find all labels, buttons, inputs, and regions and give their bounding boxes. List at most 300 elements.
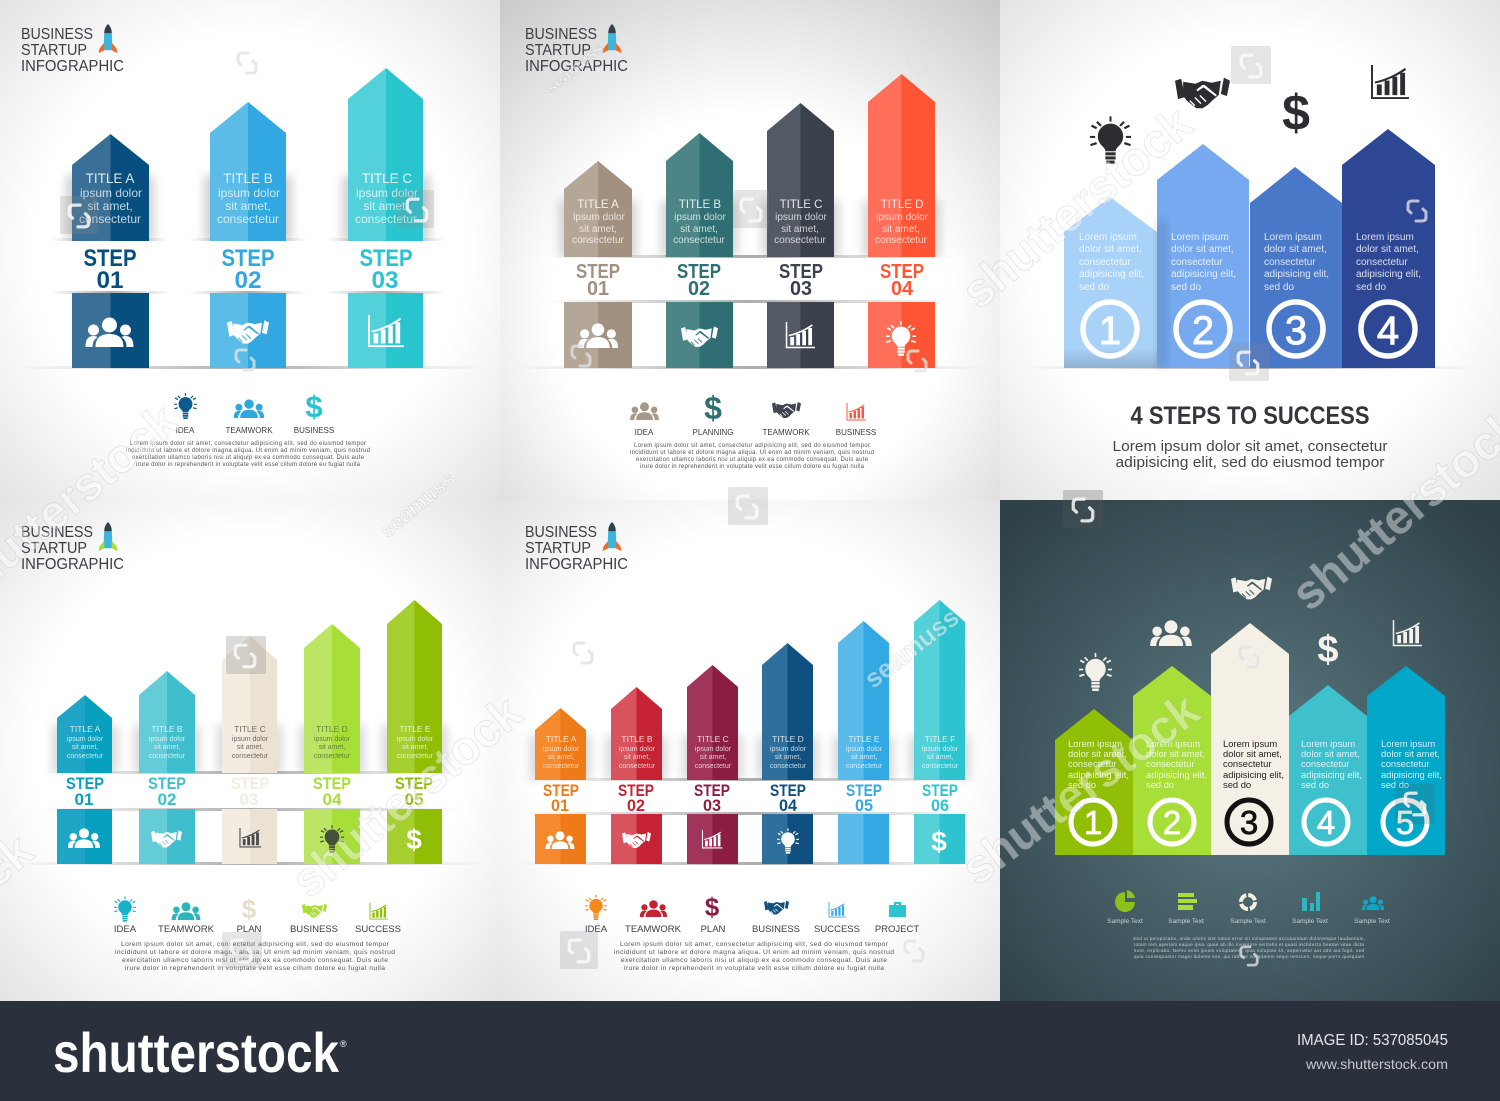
arrow: step 03: STEP — [779, 261, 823, 283]
watermark: bracket marks — [236, 53, 1426, 965]
arrow: step 03: consectetur — [695, 763, 732, 770]
arrow: step 2: consectetur — [1146, 758, 1194, 769]
arrow: step 03: STEP — [694, 781, 730, 800]
arrow: step 04: TITLE D — [316, 724, 348, 734]
arrow: step 05: TITLE E — [848, 734, 880, 744]
legend: panel 1 icons and labels — [174, 389, 334, 435]
arrow: step 05: 05 — [404, 790, 424, 809]
footer bar — [0, 1001, 1500, 1101]
arrow: step 03 — [348, 68, 423, 368]
text block: panel 4 lorem paragraph: irure dolor in reprehenderit in voluptate velit esse cillum dolore eu fugiat nulla — [125, 965, 385, 972]
arrow: step 04: TITLE D — [772, 734, 804, 744]
arrow: step 04: 04 — [779, 796, 798, 815]
arrow: step 02: STEP — [222, 245, 274, 272]
arrow: step 01 — [72, 134, 149, 368]
arrow: step 03: consectetur — [232, 753, 269, 760]
panel: six-step arrows background — [500, 500, 1000, 1001]
arrow: step 01: sit amet, — [548, 754, 574, 761]
arrow: step 4: consectetur — [1356, 257, 1408, 268]
watermark: large shutterstock marks: seamuss — [858, 602, 965, 694]
text block: panel 1 lorem paragraph — [126, 441, 370, 468]
arrow: step 5: sed do — [1381, 779, 1409, 790]
arrow: step 01: sit amet, — [579, 224, 617, 235]
panel: three-step arrows background — [0, 0, 500, 500]
logo: shutterstock: shutterstock — [53, 1021, 340, 1084]
arrow: step 03: sit amet, — [363, 199, 409, 213]
legend: panel 1 icons and labels: IDEA — [176, 426, 195, 435]
arrow: step 03: sit amet, — [237, 744, 263, 751]
arrow: step 04: TITLE D — [881, 199, 923, 211]
legend: panel 5 icons and labels: TEAMWORK — [625, 924, 682, 935]
text block: success subtitle: adipisicing elit, sed do eiusmod tempor — [1116, 454, 1384, 471]
arrow: step 3: Lorem ipsum — [1223, 738, 1277, 749]
arrow: step 05: TITLE E — [399, 724, 431, 734]
text block: panel 2 lorem paragraph — [630, 443, 874, 470]
arrow: step 03 — [222, 636, 277, 864]
arrow: step 2: Lorem ipsum — [1146, 738, 1200, 749]
arrow: step 01: consectetur — [79, 212, 141, 226]
arrow: step 1: consectetur — [1068, 758, 1116, 769]
arrow: step 03: consectetur — [774, 235, 827, 246]
watermark: stamp bracket marks — [69, 55, 1425, 962]
arrow: step 01: STEP — [66, 774, 104, 793]
arrow: step 2: dolor sit amet, — [1146, 748, 1205, 759]
arrow: step 4: dolor sit amet, — [1356, 244, 1419, 255]
heading: business startup infographic, panel 4: INFOGRAPHIC — [21, 556, 124, 573]
arrow: step 01: STEP — [576, 261, 620, 283]
text block: dark panel paragraph: sunt, explicabo. Nemo enim ipsam voluptatem, quia voluptas sit, aspernatur aut odit aut fugit, sed — [1134, 948, 1364, 953]
arrow: step 04: 04 — [322, 790, 342, 809]
legend: panel 5 icons and labels: $ — [705, 892, 720, 922]
icon: handshake, dark panel — [1231, 577, 1272, 599]
heading: business startup infographic, panel 2 — [525, 24, 628, 75]
arrow: step 03: ipsum dolor — [695, 746, 732, 753]
arrow: step 02: consectetur — [149, 753, 186, 760]
arrow: step 02: STEP — [148, 774, 186, 793]
arrow: step 06: ipsum dolor — [922, 746, 959, 753]
arrow: step 04: STEP — [313, 774, 351, 793]
arrow: step 02: ipsum dolor — [619, 746, 656, 753]
arrow: step 01: consectetur — [543, 763, 580, 770]
legend: panel 1 icons and labels: $ — [305, 389, 323, 424]
legend: dark panel icons and labels — [1107, 890, 1390, 925]
arrow: step 4: dolor sit amet, — [1301, 748, 1360, 759]
arrow: step 02: consectetur — [619, 763, 656, 770]
text block: panel 2 lorem paragraph: Lorem ipsum dolor sit amet, consectetur adipisicing elit, sed do eiusmod tempor — [634, 443, 870, 449]
heading: business startup infographic, panel 5: STARTUP — [525, 540, 591, 557]
icon: light bulb — [1090, 116, 1131, 164]
legend: panel 1 icons and labels: BUSINESS — [294, 426, 334, 435]
arrow: step 03: consectetur — [355, 212, 417, 226]
arrow: step 03 — [687, 665, 738, 864]
panel: dark five-step background — [1000, 500, 1500, 1001]
arrow: step 1: Lorem ipsum — [1068, 738, 1122, 749]
legend: panel 2 icons and labels: TEAMWORK — [762, 428, 810, 437]
arrow: step 05: sit amet, — [851, 754, 877, 761]
heading: business startup infographic, panel 1: STARTUP — [21, 42, 87, 59]
arrow: step 2 — [1157, 144, 1249, 368]
arrow: step 2: adipisicing elit, — [1171, 269, 1236, 280]
arrow: step 3: adipisicing elit, — [1223, 769, 1284, 780]
arrow: step 04: ipsum dolor — [876, 212, 929, 223]
arrow: step 05: STEP — [395, 774, 433, 793]
arrow: step 01 — [564, 161, 632, 368]
arrow: step 4: Lorem ipsum — [1301, 738, 1355, 749]
arrow: step 06: TITLE F — [925, 734, 955, 744]
arrow: step 1 — [1055, 709, 1133, 855]
arrow: step 02 — [139, 671, 195, 864]
arrow: step 02: ipsum dolor — [218, 186, 280, 200]
heading: business startup infographic, panel 4 — [21, 522, 124, 573]
arrow: step 3: 3 — [1285, 309, 1307, 353]
chart: three arrows — [15, 68, 485, 369]
text block: panel 2 lorem paragraph: exercitation ullamco laboris nisi ut aliquip ex ea commodo consequat. Duis aute — [636, 457, 869, 463]
arrow: step 1: sed do — [1068, 779, 1096, 790]
arrow: step 2: sed do — [1146, 779, 1174, 790]
arrow: step 02: STEP — [677, 261, 721, 283]
heading: business startup infographic, panel 1: BUSINESS — [21, 26, 93, 43]
arrow: step 05: ipsum dolor — [846, 746, 883, 753]
logo: registered mark: ® — [340, 1039, 347, 1049]
icon: dollar sign: $ — [1282, 85, 1310, 141]
legend: panel 5 icons and labels — [585, 892, 919, 935]
arrow: step 4 — [1342, 129, 1435, 368]
arrow: step 01: sit amet, — [72, 744, 98, 751]
legend: dark panel icons and labels: Sample Text — [1107, 918, 1143, 925]
arrow: step 06: $ — [931, 826, 947, 857]
arrow: step 4: sed do — [1356, 282, 1386, 293]
arrow: step 4: adipisicing elit, — [1356, 269, 1421, 280]
arrow: step 02 — [666, 133, 733, 368]
arrow: step 05: $ — [406, 824, 422, 855]
arrow: step 05: sit amet, — [402, 744, 428, 751]
legend: panel 2 icons and labels: IDEA — [635, 428, 654, 437]
arrow: step 06: consectetur — [922, 763, 959, 770]
text block: dark panel paragraph: quia consequuntur magni dolores eos, qui ratione voluptatem sequi nesciunt, neque porro quisquam — [1134, 954, 1364, 959]
arrow: step 02: 02 — [234, 267, 262, 294]
legend: panel 2 icons and labels: PLANNING — [693, 428, 733, 437]
arrow: step 03: 03 — [790, 278, 812, 300]
arrow: step 06: STEP — [922, 781, 958, 800]
arrow: step 03: STEP — [360, 245, 412, 272]
arrow: step 04: STEP — [880, 261, 924, 283]
arrow: step 01: STEP — [84, 245, 136, 272]
arrow: step 2: sed do — [1171, 282, 1201, 293]
arrow: step 04: consectetur — [875, 235, 928, 246]
arrow: step 01: 01 — [587, 278, 609, 300]
arrow: step 2: adipisicing elit, — [1146, 769, 1207, 780]
arrow: step 1: consectetur — [1079, 257, 1131, 268]
arrow: step 04: ipsum dolor — [770, 746, 807, 753]
arrow: step 5: dolor sit amet, — [1381, 748, 1440, 759]
arrow: step 4 — [1289, 685, 1367, 855]
arrow: step 02: consectetur — [217, 212, 279, 226]
text block: panel 5 lorem paragraph: Lorem ipsum dolor sit amet, consectetur adipisicing elit, sed do eiusmod tempor — [620, 941, 889, 948]
panel: five-step arrows background — [0, 500, 500, 1001]
arrow: step 01: TITLE A — [546, 734, 577, 744]
arrow: step 4: 4 — [1317, 804, 1335, 841]
arrow: step 03: ipsum dolor — [232, 736, 269, 743]
legend: dark panel icons and labels: Sample Text — [1292, 918, 1328, 925]
arrow: step 01: consectetur — [572, 235, 625, 246]
arrow: step 05: ipsum dolor — [397, 736, 434, 743]
arrow: step 01: 01 — [551, 796, 569, 815]
watermark: stamp squares — [60, 46, 1435, 969]
text block: panel 5 lorem paragraph: irure dolor in reprehenderit in voluptate velit esse cillum dolore eu fugiat nulla — [624, 965, 884, 972]
arrow: step 02 — [210, 102, 286, 368]
arrow: step 03: ipsum dolor — [775, 212, 828, 223]
arrow: step 5: 5 — [1396, 804, 1414, 841]
arrow: step 03: TITLE C — [697, 734, 729, 744]
chart: dark panel five arrows — [1055, 623, 1445, 855]
legend: panel 4 icons and labels: TEAMWORK — [158, 924, 215, 935]
arrow: step 03: 03 — [372, 267, 398, 294]
arrow: step 3: sed do — [1264, 282, 1294, 293]
chart: four steps to success arrows — [1025, 129, 1475, 369]
arrow: step 01: 01 — [74, 790, 94, 809]
arrow: step 01: consectetur — [67, 753, 104, 760]
heading: business startup infographic, panel 4: STARTUP — [21, 540, 87, 557]
icon: people, dark panel — [1150, 620, 1192, 646]
arrow: step 03: TITLE C — [234, 724, 266, 734]
arrow: step 4: Lorem ipsum — [1356, 232, 1414, 243]
heading: business startup infographic, panel 2: BUSINESS — [525, 26, 597, 43]
arrow: step 04 — [762, 643, 813, 864]
arrow: step 02: sit amet, — [624, 754, 650, 761]
icon: handshake — [1175, 78, 1230, 108]
icon: light bulb, dark panel — [1079, 653, 1112, 691]
arrow: step 5: Lorem ipsum — [1381, 738, 1435, 749]
arrow: step 05 — [838, 621, 889, 864]
arrow: step 4: 4 — [1377, 309, 1399, 353]
arrow: step 2: Lorem ipsum — [1171, 232, 1229, 243]
text: image id: IMAGE ID: 537085045 — [1297, 1032, 1448, 1049]
legend: panel 5 icons and labels: SUCCESS — [814, 924, 860, 935]
arrow: step 01 — [535, 708, 586, 864]
heading: business startup infographic, panel 1: INFOGRAPHIC — [21, 58, 124, 75]
arrow: step 3: adipisicing elit, — [1264, 269, 1329, 280]
arrow: step 1: dolor sit amet, — [1079, 244, 1142, 255]
arrow: step 02: TITLE B — [621, 734, 653, 744]
arrow: step 01: sit amet, — [87, 199, 133, 213]
watermark: large shutterstock marks: shutterstock — [282, 686, 532, 908]
watermark: large shutterstock marks: shutterstock — [952, 683, 1209, 896]
legend: panel 4 icons and labels: $ — [242, 894, 257, 924]
arrow: step 06: sit amet, — [927, 754, 953, 761]
arrow: step 02: 02 — [688, 278, 710, 300]
arrow: step 1: adipisicing elit, — [1068, 769, 1129, 780]
arrow: step 01: ipsum dolor — [80, 186, 142, 200]
arrow: step 02 — [611, 687, 662, 864]
legend: panel 2 icons and labels: BUSINESS — [836, 428, 876, 437]
text block: panel 5 lorem paragraph: incididunt ut labore et dolore magna aliqua. Ut enim ad minim veniam, quis nostrud — [614, 949, 894, 956]
arrow: step 5 — [1367, 666, 1445, 855]
text block: dark panel paragraph: totam rem aperiam eaque ipsa, quae ab illo inventore veritatis et quasi architecto beatae vitae dicta — [1134, 942, 1364, 947]
arrow: step 06: 06 — [931, 796, 949, 815]
arrow: step 1: 1 — [1084, 804, 1102, 841]
text block: panel 4 lorem paragraph: exercitation ullamco laboris nisi ut aliquip ex ea commodo consequat. Duis aute — [122, 957, 388, 964]
arrow: step 2: consectetur — [1171, 257, 1223, 268]
legend: panel 4 icons and labels: SUCCESS — [355, 924, 401, 935]
arrow: step 01: 01 — [96, 267, 124, 294]
arrow: step 01: TITLE A — [86, 171, 134, 186]
arrow: step 01: TITLE A — [70, 724, 101, 734]
text block: panel 4 lorem paragraph: incididunt ut labore et dolore magna aliqua. Ut enim ad minim veniam, quis nostrud — [115, 949, 395, 956]
arrow: step 3 — [1250, 167, 1342, 368]
arrow: step 03: sit amet, — [781, 224, 819, 235]
arrow: step 05: consectetur — [397, 753, 434, 760]
legend: panel 5 icons and labels: BUSINESS — [752, 924, 800, 935]
legend: dark panel icons and labels: Sample Text — [1230, 918, 1266, 925]
arrow: step 3: dolor sit amet, — [1264, 244, 1327, 255]
text block: panel 4 lorem paragraph — [115, 941, 395, 972]
text block: dark panel paragraph: Sed ut perspiciatis, unde omnis iste natus error sit voluptatem accusantium doloremque laudantium, — [1133, 936, 1365, 941]
legend: dark panel icons and labels: Sample Text — [1354, 918, 1390, 925]
arrow: step 5: adipisicing elit, — [1381, 769, 1442, 780]
arrow: step 3: consectetur — [1264, 257, 1316, 268]
arrow: step 02: 02 — [627, 796, 645, 815]
legend: panel 2 icons and labels — [630, 390, 876, 437]
chart: five arrows — [15, 600, 485, 865]
arrow: step 5: consectetur — [1381, 758, 1429, 769]
text block: panel 5 lorem paragraph: exercitation ullamco laboris nisi ut aliquip ex ea commodo consequat. Duis aute — [621, 957, 887, 964]
heading: business startup infographic, panel 5: BUSINESS — [525, 524, 597, 541]
legend: panel 5 icons and labels: IDEA — [585, 924, 608, 935]
text block: panel 5 lorem paragraph — [614, 941, 894, 972]
legend: panel 1 icons and labels: TEAMWORK — [225, 426, 273, 435]
arrow: step 02: TITLE B — [223, 171, 273, 186]
arrow: step 1: sed do — [1079, 282, 1109, 293]
legend: panel 4 icons and labels: PLAN — [237, 924, 262, 935]
arrow: step 03: sit amet, — [700, 754, 726, 761]
title: 4 steps to success: 4 STEPS TO SUCCESS — [1130, 402, 1370, 430]
arrow: step 3: consectetur — [1223, 758, 1271, 769]
arrow: step 04: consectetur — [770, 763, 807, 770]
arrow: step 05 — [387, 600, 442, 864]
arrow: step 3: sed do — [1223, 779, 1251, 790]
watermark: large shutterstock marks: seamuss — [376, 467, 460, 543]
arrow: step 3 — [1211, 623, 1289, 855]
arrow: step 4: consectetur — [1301, 758, 1349, 769]
arrow: step 04: consectetur — [314, 753, 351, 760]
text block: panel 4 lorem paragraph: Lorem ipsum dolor sit amet, consectetur adipisicing elit, sed do eiusmod tempor — [121, 941, 390, 948]
arrow: step 04: ipsum dolor — [314, 736, 351, 743]
arrow: step 03: ipsum dolor — [356, 186, 418, 200]
arrow: step 02: consectetur — [673, 235, 726, 246]
arrow: step 4: adipisicing elit, — [1301, 769, 1362, 780]
text block: dark panel paragraph — [1133, 936, 1365, 959]
arrow: step 05: STEP — [846, 781, 882, 800]
icon: dollar, dark panel: $ — [1317, 629, 1339, 671]
arrow: step 2: 2 — [1192, 309, 1214, 353]
text block: panel 2 lorem paragraph: incididunt ut labore et dolore magna aliqua. Ut enim ad minim veniam, quis nostrud — [630, 450, 874, 456]
arrow: step 3: 3 — [1240, 804, 1258, 841]
arrow: step 04 — [868, 74, 935, 368]
heading: business startup infographic, panel 2: INFOGRAPHIC — [525, 58, 628, 75]
arrow: step 06 — [914, 600, 965, 864]
arrow: step 2: dolor sit amet, — [1171, 244, 1234, 255]
arrow: step 02: TITLE B — [679, 199, 721, 211]
arrow: step 01: ipsum dolor — [573, 212, 626, 223]
text block: panel 1 lorem paragraph: Lorem ipsum dolor sit amet, consectetur adipisicing elit, sed do eiusmod tempor — [130, 441, 366, 447]
arrow: step 02: STEP — [618, 781, 654, 800]
arrow: step 4: sed do — [1301, 779, 1329, 790]
arrow: step 01: ipsum dolor — [543, 746, 580, 753]
arrow: step 1: 1 — [1099, 309, 1121, 353]
arrow: step 01: ipsum dolor — [67, 736, 104, 743]
heading: business startup infographic, panel 5 — [525, 522, 628, 573]
arrow: step 04: STEP — [770, 781, 806, 800]
legend: dark panel icons and labels: Sample Text — [1168, 918, 1204, 925]
heading: business startup infographic, panel 1 — [21, 24, 124, 75]
legend: panel 5 icons and labels: PROJECT — [875, 924, 919, 935]
arrow: step 02: sit amet, — [680, 224, 718, 235]
arrow: step 04 — [304, 624, 360, 864]
text block: success subtitle — [1112, 438, 1388, 471]
arrow: step 3: dolor sit amet, — [1223, 748, 1282, 759]
heading: business startup infographic, panel 2: STARTUP — [525, 42, 591, 59]
icon: chart, dark panel — [1393, 620, 1422, 646]
arrow: step 3: Lorem ipsum — [1264, 232, 1322, 243]
arrow: step 02: sit amet, — [225, 199, 271, 213]
legend: panel 4 icons and labels — [114, 894, 401, 935]
panel: four steps to success background — [1000, 0, 1500, 500]
arrow: step 2: 2 — [1163, 804, 1181, 841]
arrow: step 05: consectetur — [846, 763, 883, 770]
arrow: step 02: ipsum dolor — [149, 736, 186, 743]
text block: panel 2 lorem paragraph: irure dolor in reprehenderit in voluptate velit esse cillum dolore eu fugiat nulla — [640, 464, 865, 470]
arrow: step 01: STEP — [543, 781, 579, 800]
arrow: step 1 — [1064, 197, 1157, 368]
text: website: www.shutterstock.com — [1305, 1056, 1448, 1072]
arrow: step 03: 03 — [703, 796, 721, 815]
watermark: large shutterstock marks: seamuss — [543, 40, 607, 97]
arrow: step 04: sit amet, — [319, 744, 345, 751]
arrow: step 01: TITLE A — [577, 199, 619, 211]
arrow: step 03: 03 — [240, 790, 258, 809]
legend: panel 5 icons and labels: PLAN — [701, 924, 726, 935]
arrow: step 03: TITLE C — [780, 199, 822, 211]
text block: success subtitle: Lorem ipsum dolor sit amet, consectetur — [1112, 438, 1388, 455]
arrow: step 03 — [767, 103, 834, 368]
chart: six arrows — [515, 600, 985, 865]
legend: panel 4 icons and labels: BUSINESS — [290, 924, 338, 935]
chart: four arrows — [515, 74, 985, 369]
heading: business startup infographic, panel 5: INFOGRAPHIC — [525, 556, 628, 573]
arrow: step 02: sit amet, — [154, 744, 180, 751]
arrow: step 04: sit amet, — [775, 754, 801, 761]
text block: panel 1 lorem paragraph: irure dolor in reprehenderit in voluptate velit esse cillum dolore eu fugiat nulla — [136, 462, 361, 468]
arrow: step 04: sit amet, — [882, 224, 920, 235]
arrow: step 02: 02 — [158, 790, 176, 809]
arrow: step 05: 05 — [855, 796, 873, 815]
arrow: step 1: adipisicing elit, — [1079, 269, 1144, 280]
arrow: step 1: dolor sit amet, — [1068, 748, 1127, 759]
arrow: step 04: 04 — [891, 278, 914, 300]
watermark: large shutterstock marks: shutterstock — [952, 97, 1202, 319]
text block: panel 1 lorem paragraph: exercitation ullamco laboris nisi ut aliquip ex ea commodo consequat. Duis aute — [132, 455, 365, 461]
arrow: step 2 — [1133, 666, 1211, 855]
arrow: step 1: Lorem ipsum — [1079, 232, 1137, 243]
arrow: step 03: STEP — [231, 774, 269, 793]
heading: business startup infographic, panel 4: BUSINESS — [21, 524, 93, 541]
arrow: step 01 — [57, 695, 112, 864]
arrow: step 03: TITLE C — [362, 171, 412, 186]
arrow: step 02: TITLE B — [151, 724, 183, 734]
panel: four-step arrows background — [500, 0, 1000, 500]
icon: growth chart — [1371, 65, 1409, 99]
legend: panel 2 icons and labels: $ — [704, 390, 722, 426]
